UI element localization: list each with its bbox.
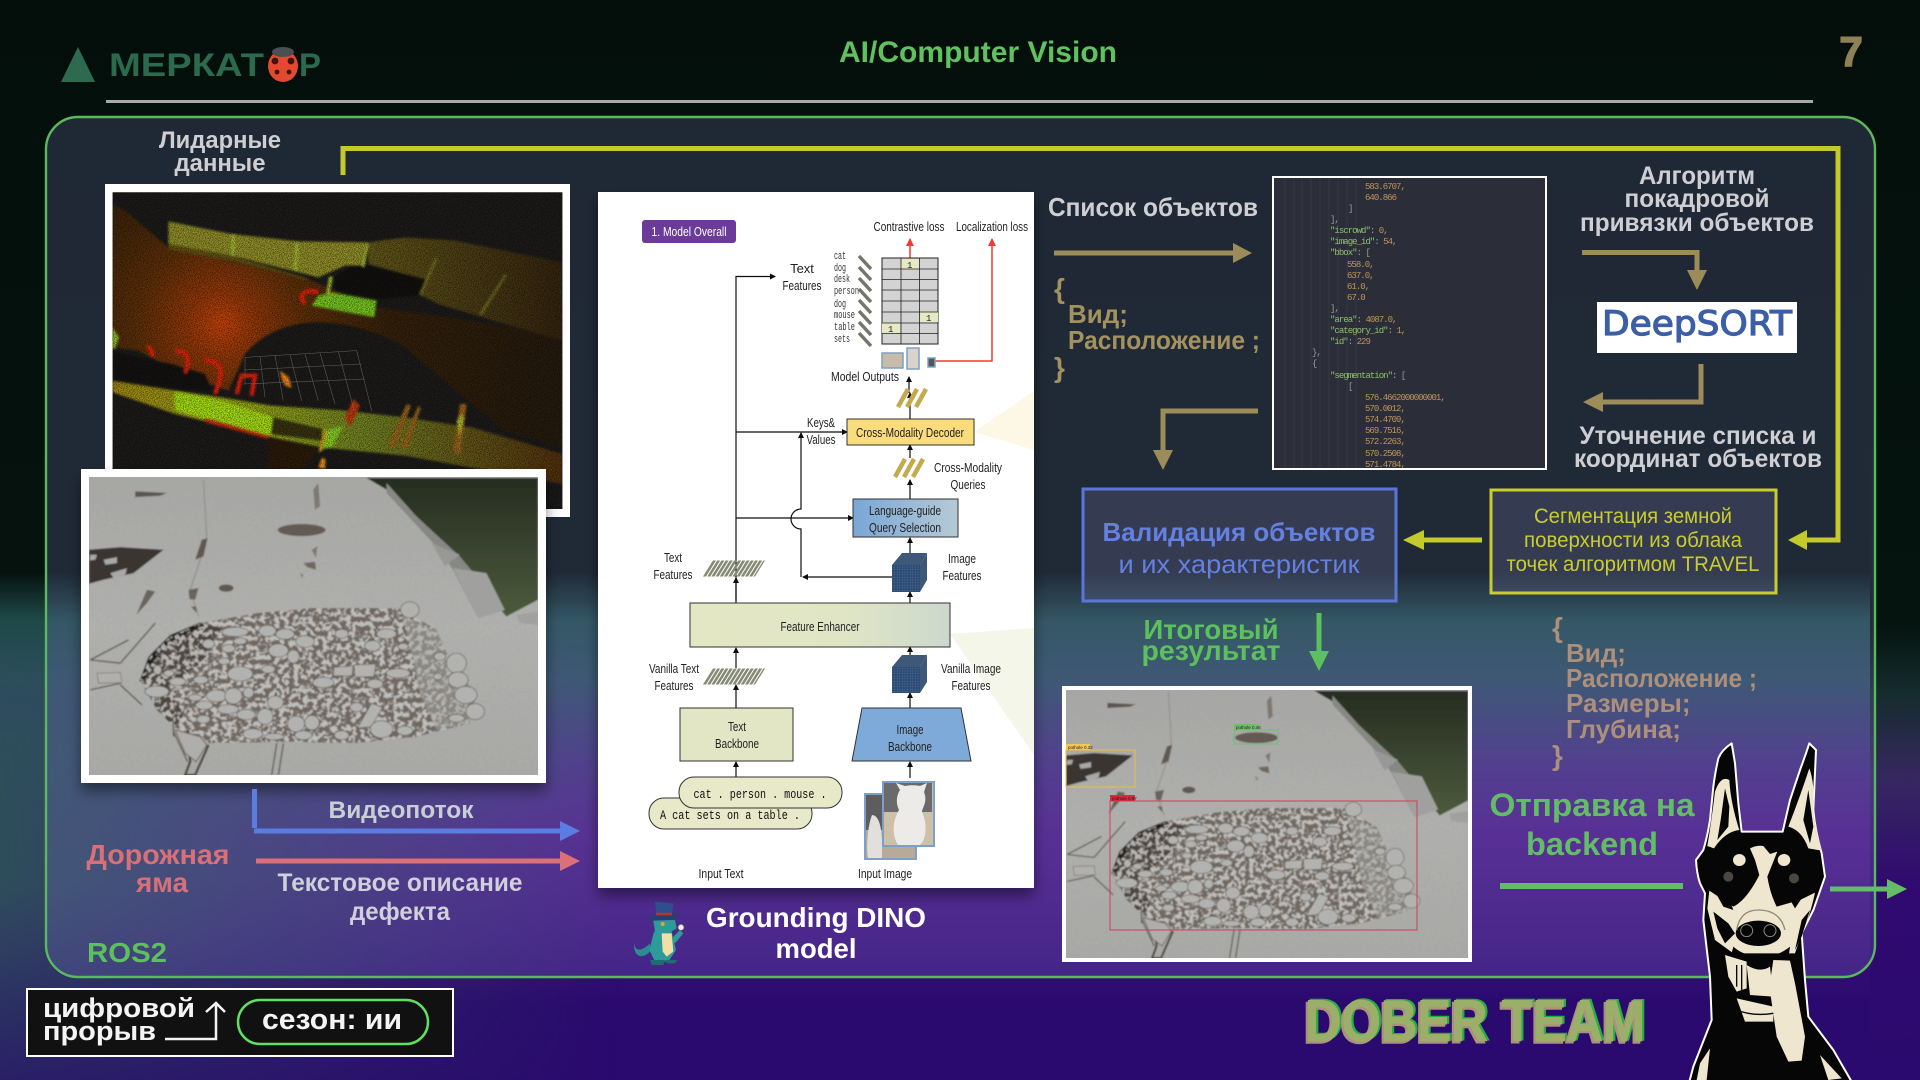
arrow: to DeepSORT bbox=[1582, 252, 1707, 290]
labels: Values bbox=[806, 432, 836, 447]
labels: Queries bbox=[950, 477, 986, 492]
badge: model overall: 1. Model Overall bbox=[652, 224, 727, 239]
labels: Features bbox=[952, 678, 991, 693]
team name: DOBER TEAM bbox=[1305, 989, 1645, 1054]
panel: JSON output: 637.0, bbox=[1347, 271, 1374, 281]
heading: object list: Список объектов bbox=[1048, 192, 1258, 222]
heading: lidar data: данные bbox=[174, 150, 266, 177]
labels: Cross-Modality bbox=[934, 460, 1002, 475]
diagram: Grounding DINO architecture bbox=[598, 192, 1034, 888]
text: object attributes: Вид; bbox=[1068, 299, 1128, 329]
label: Grounding DINO model: Grounding DINO bbox=[706, 902, 926, 933]
box: TRAVEL segmentation: поверхности из облака bbox=[1524, 529, 1742, 552]
labels: Keys& bbox=[807, 415, 835, 430]
text feature words: mouse bbox=[834, 310, 855, 322]
text: extended attributes: } bbox=[1552, 740, 1563, 771]
model output thumbnails bbox=[882, 348, 935, 369]
box: language-guide query selection: Query Selection bbox=[869, 520, 941, 535]
text: extended attributes: { bbox=[1552, 612, 1563, 643]
line: to backend bbox=[1500, 883, 1683, 889]
label: road pit: Дорожная bbox=[86, 839, 229, 870]
wedge: decoder zoom bbox=[974, 391, 1034, 450]
box: validation: Валидация объектов bbox=[1102, 517, 1376, 547]
box: image backbone: Backbone bbox=[888, 739, 932, 754]
vanilla text hatch bbox=[708, 668, 760, 684]
image feature cube bbox=[892, 553, 927, 592]
logo: Меркатор: Р bbox=[299, 47, 321, 83]
losses: Contrastive loss bbox=[874, 219, 945, 234]
labels: Text bbox=[664, 550, 682, 565]
labels: Text bbox=[790, 261, 814, 276]
background bbox=[0, 577, 1920, 1080]
team name: DOBER TEAM bbox=[1307, 988, 1647, 1053]
box: image backbone bbox=[852, 708, 971, 761]
labels: Features bbox=[942, 568, 982, 583]
box: text backbone: Text bbox=[728, 719, 746, 734]
text feature words: desk bbox=[834, 274, 850, 286]
panel: JSON output: ] bbox=[1348, 204, 1352, 214]
panel: JSON output: "category_id": 1, bbox=[1330, 326, 1405, 336]
query bars bbox=[895, 389, 926, 477]
labels: Features bbox=[782, 278, 822, 293]
panel: JSON output: "segmentation": [ bbox=[1330, 371, 1406, 381]
text: object attributes bbox=[1054, 273, 1260, 383]
panel: JSON output: 570.2508, bbox=[1365, 449, 1405, 459]
badge: Цифровой прорыв: цифровой bbox=[43, 993, 195, 1023]
label: defect text description: дефекта bbox=[350, 898, 451, 926]
panel: JSON output: 67.0 bbox=[1347, 293, 1365, 303]
label: send to backend: Отправка на bbox=[1490, 787, 1695, 823]
text feature words: person bbox=[834, 286, 859, 298]
box: text backbone bbox=[680, 708, 793, 761]
panel: JSON output: 640.866 bbox=[1365, 193, 1397, 203]
arrow: video stream bbox=[254, 789, 580, 841]
box: TRAVEL segmentation: точек алгоритмом TRAVEL bbox=[1506, 553, 1760, 576]
heading: lidar data bbox=[159, 127, 281, 177]
panel: JSON output: }, bbox=[1312, 348, 1321, 358]
box: language-guide query selection bbox=[853, 499, 958, 537]
box: language-guide query selection: Language-guide bbox=[869, 503, 941, 518]
text feature words: sets bbox=[834, 334, 850, 346]
arrowhead: into segmentation bbox=[1788, 530, 1807, 550]
text feature hatch bbox=[708, 560, 760, 576]
text: object attributes: } bbox=[1054, 352, 1065, 383]
panel: JSON output: "id": 229 bbox=[1330, 337, 1370, 347]
wedge: enhancer zoom bbox=[950, 628, 1034, 755]
heading: tracking algorithm: привязки объектов bbox=[1580, 209, 1814, 237]
team name: DOBER TEAM bbox=[1303, 991, 1643, 1056]
box: validation bbox=[1083, 489, 1396, 601]
label: ROS2: ROS2 bbox=[87, 937, 167, 968]
badge: Цифровой прорыв bbox=[27, 989, 453, 1056]
badge: Цифровой прорыв: прорыв bbox=[43, 1016, 156, 1046]
box: cross-modality decoder: Cross-Modality Decoder bbox=[856, 425, 965, 440]
pill: input sentence bbox=[649, 798, 812, 829]
photo: road pothole bbox=[70, 460, 570, 793]
text: extended attributes: Глубина; bbox=[1566, 714, 1681, 744]
losses: Localization loss bbox=[956, 219, 1028, 234]
labels bbox=[649, 261, 1002, 881]
photo: detection result: pothole 0.32 bbox=[1068, 745, 1093, 750]
similarity grid: 1 bbox=[926, 314, 931, 324]
label: defect text description: Текстовое описание bbox=[278, 869, 523, 897]
vanilla image cube bbox=[892, 655, 927, 693]
label: road pit: яма bbox=[135, 867, 188, 898]
text: refine list bbox=[1574, 422, 1822, 473]
box: feature enhancer: Feature Enhancer bbox=[780, 619, 860, 634]
panel: JSON output: 576.4662000000001, bbox=[1365, 393, 1445, 403]
panel: JSON output: "iscrowd": 0, bbox=[1330, 226, 1388, 236]
text: refine list: Уточнение списка и bbox=[1580, 422, 1816, 450]
label: send to backend: backend bbox=[1526, 826, 1658, 862]
panel: JSON output: 569.7516, bbox=[1365, 426, 1405, 436]
badge: model overall bbox=[642, 220, 736, 243]
text: extended attributes bbox=[1552, 612, 1757, 771]
box: image backbone: Image bbox=[896, 722, 924, 737]
arrow: lidar data line bbox=[343, 148, 1838, 540]
logo: Меркатор bbox=[61, 47, 321, 83]
panel: JSON output: [ bbox=[1348, 382, 1353, 392]
pill: input sentence: A cat sets on a table . bbox=[660, 808, 800, 823]
page number: 7 bbox=[1839, 28, 1863, 75]
photo: detection result: pothole 0.46 bbox=[1236, 725, 1261, 730]
panel: JSON output: 61.0, bbox=[1347, 282, 1369, 292]
text: object attributes: { bbox=[1054, 273, 1065, 304]
panel: JSON output bbox=[1273, 177, 1546, 470]
labels: Input Image bbox=[858, 866, 912, 881]
arrow: segmentation to validation bbox=[1403, 530, 1482, 550]
pill: input categories bbox=[679, 777, 842, 808]
arrow: list to validation bbox=[1153, 411, 1258, 470]
arrow: final result bbox=[1309, 613, 1329, 671]
text feature words: dog bbox=[834, 299, 846, 311]
logo: Меркатор: МЕРКАТ bbox=[109, 47, 265, 83]
panel: JSON output: ], bbox=[1330, 215, 1339, 225]
text: object attributes: Расположение ; bbox=[1068, 325, 1260, 355]
heading: tracking algorithm bbox=[1580, 162, 1814, 237]
red loss arrows bbox=[910, 239, 992, 361]
photo: detection result: pothole 0.87 bbox=[1112, 796, 1137, 801]
logo: DeepSORT: DeepSORT bbox=[1602, 304, 1792, 344]
panel: JSON output: 574.4709, bbox=[1365, 415, 1405, 425]
box: feature enhancer bbox=[690, 603, 950, 647]
losses bbox=[874, 219, 1028, 234]
heading: tracking algorithm: Алгоритм bbox=[1639, 162, 1755, 190]
labels: Features bbox=[654, 567, 693, 582]
panel: JSON output: "bbox": [ bbox=[1330, 248, 1370, 258]
label: final result bbox=[1142, 614, 1280, 666]
similarity grid: 1 bbox=[907, 261, 912, 271]
box: cross-modality decoder bbox=[847, 419, 974, 445]
panel: JSON output: 570.0012, bbox=[1365, 404, 1405, 414]
labels: Features bbox=[654, 678, 694, 693]
panel: JSON output: 572.2263, bbox=[1365, 437, 1405, 447]
label: video stream: Видеопоток bbox=[328, 797, 475, 824]
panel: JSON output: { bbox=[1312, 359, 1317, 369]
heading: tracking algorithm: покадровой bbox=[1624, 185, 1770, 213]
badge: Цифровой прорыв: сезон: ии bbox=[262, 1004, 402, 1036]
box: TRAVEL segmentation: Сегментация земной bbox=[1534, 505, 1732, 528]
feature bars bbox=[859, 256, 871, 346]
similarity grid: 1 bbox=[888, 325, 893, 335]
text feature words: dog bbox=[834, 263, 846, 275]
labels: Model Outputs bbox=[831, 369, 899, 384]
arrow: to backend bbox=[1830, 879, 1907, 899]
text: extended attributes: Размеры; bbox=[1566, 688, 1690, 718]
box: TRAVEL segmentation bbox=[1491, 490, 1776, 593]
label: final result: Итоговый bbox=[1144, 614, 1278, 645]
heading: lidar data: Лидарные bbox=[159, 127, 281, 154]
input images: cat bbox=[865, 782, 934, 859]
panel: JSON output: "image_id": 54, bbox=[1330, 237, 1396, 247]
panel: JSON output: ], bbox=[1330, 304, 1339, 314]
text: extended attributes: Расположение ; bbox=[1566, 663, 1757, 693]
pill: input categories: cat . person . mouse . bbox=[694, 787, 826, 802]
text feature words bbox=[834, 251, 859, 346]
mascot: doberman bbox=[1689, 743, 1852, 1080]
panel: JSON output: "area": 4087.0, bbox=[1330, 315, 1396, 325]
text: extended attributes: Вид; bbox=[1566, 638, 1626, 668]
labels: Vanilla Image bbox=[941, 661, 1001, 676]
panel: JSON output: 583.6707, bbox=[1365, 182, 1405, 192]
label: send to backend bbox=[1490, 787, 1695, 862]
panel: JSON output: 571.4784, bbox=[1365, 460, 1405, 470]
text feature words: cat bbox=[834, 251, 846, 263]
icon: dino mascot bbox=[634, 902, 684, 965]
photo: lidar point cloud bbox=[105, 184, 572, 517]
labels: Image bbox=[948, 551, 976, 566]
labels: Vanilla Text bbox=[649, 661, 699, 676]
text feature words: table bbox=[834, 322, 855, 334]
label: road pit bbox=[86, 839, 229, 898]
text: refine list: координат объектов bbox=[1574, 445, 1822, 473]
label: Grounding DINO model: model bbox=[776, 933, 856, 964]
main panel bbox=[46, 117, 1875, 977]
arrow: text description bbox=[256, 851, 580, 871]
arrow: to JSON bbox=[1054, 243, 1252, 263]
connector lines bbox=[736, 276, 910, 778]
label: defect text description bbox=[278, 869, 523, 926]
box: validation: и их характеристик bbox=[1118, 549, 1360, 579]
arrow: from DeepSORT bbox=[1583, 364, 1701, 412]
title: AI/Computer Vision bbox=[839, 36, 1117, 69]
panel: JSON output: 558.0, bbox=[1347, 260, 1374, 270]
labels: Input Text bbox=[698, 866, 744, 881]
box: text backbone: Backbone bbox=[715, 736, 759, 751]
label: final result: результат bbox=[1142, 635, 1280, 666]
similarity grid bbox=[882, 258, 938, 344]
label: Grounding DINO model bbox=[706, 902, 926, 964]
photo: detection result bbox=[1049, 674, 1496, 975]
